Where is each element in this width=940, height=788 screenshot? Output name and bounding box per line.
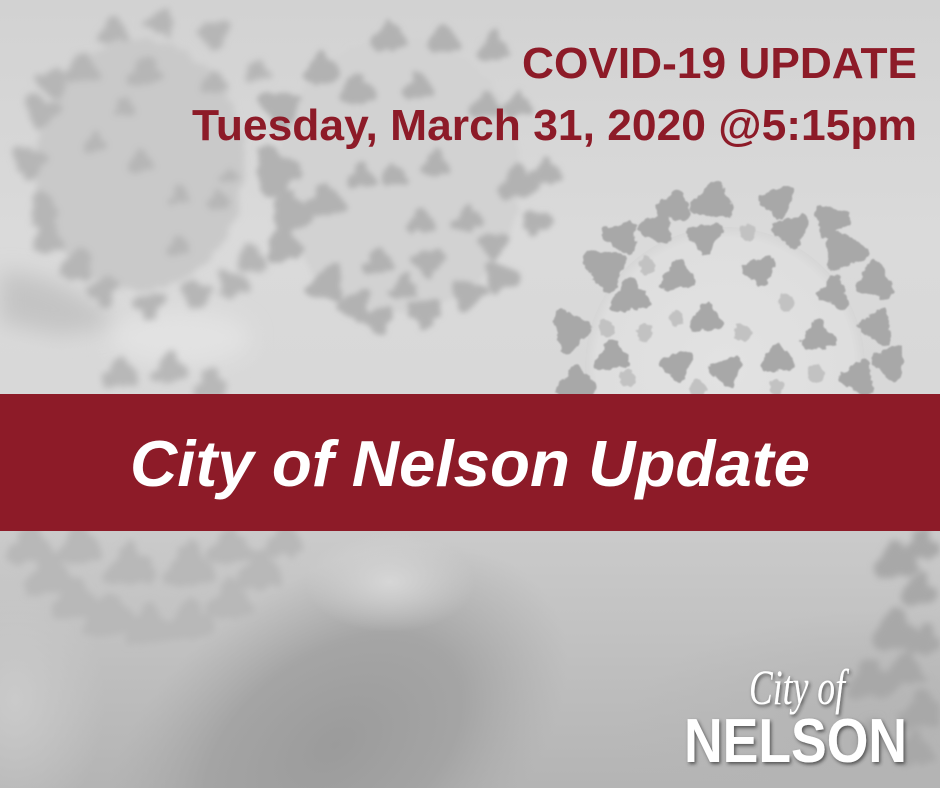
banner: City of Nelson Update: City of Nelson Update [130,427,810,500]
virus particle: large sharp right [553,177,907,507]
virus particle: lower left, behind the banner (blurred) [6,352,305,645]
heading: COVID-19 UPDATE: COVID-19 UPDATE [522,39,917,88]
virus particle: top left (blurred) [12,2,271,321]
logo: City of Nelson [684,659,907,776]
virus particle: top centre (blurred) [255,20,562,338]
virus particle: bottom right edge (blurred) [846,529,940,767]
logo: City of Nelson: NELSON [684,707,907,776]
logo: City of Nelson: City of [749,659,849,715]
date and time line: Tuesday, March 31, 2020 @5:15pm [192,101,917,150]
banner: City of Nelson Update [0,394,940,531]
